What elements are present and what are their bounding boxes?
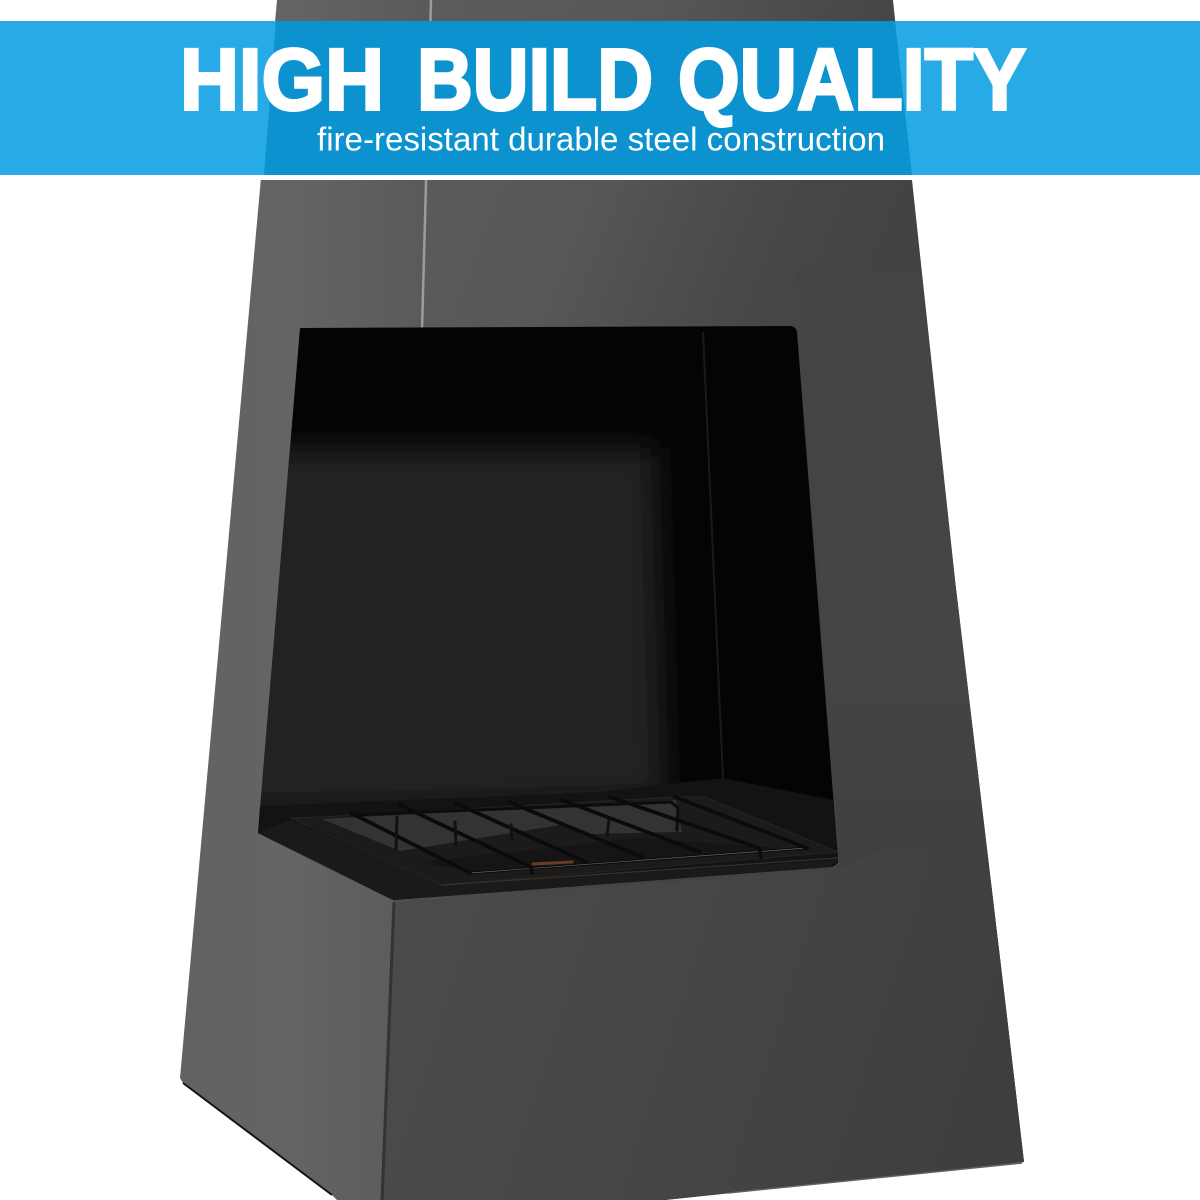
fire grate (290, 797, 838, 885)
heading: BUILD (417, 32, 653, 128)
floor front strip (258, 820, 838, 900)
frame rails (351, 802, 807, 873)
side wall crease (703, 332, 723, 778)
grate legs (396, 817, 609, 849)
floor (258, 778, 838, 900)
firebox black interior (258, 326, 838, 900)
lit back wall (230, 332, 723, 820)
heading (180, 32, 1026, 128)
grate bars (351, 797, 807, 873)
firebox opening (230, 326, 838, 900)
tray inner panel (322, 800, 682, 851)
chiminea steel body (180, 0, 1024, 1200)
banner band (0, 21, 1200, 175)
left face of body (180, 0, 431, 1200)
top banner (0, 21, 1200, 180)
tray (290, 797, 838, 885)
subheading: fire-resistant durable steel construction (317, 120, 885, 158)
front face lower (381, 850, 1024, 1200)
front face upper (381, 0, 1024, 1200)
tray floor shade (420, 838, 780, 872)
ember glow (533, 862, 572, 864)
base shadow edge (183, 1083, 332, 1195)
banner white underline (0, 175, 1200, 180)
corner seam highlight (422, 0, 431, 330)
banner darker overlap over body (264, 21, 912, 175)
heading: HIGH (180, 32, 384, 128)
front face right strip (797, 270, 1024, 1162)
heading: QUALITY (678, 32, 1026, 128)
